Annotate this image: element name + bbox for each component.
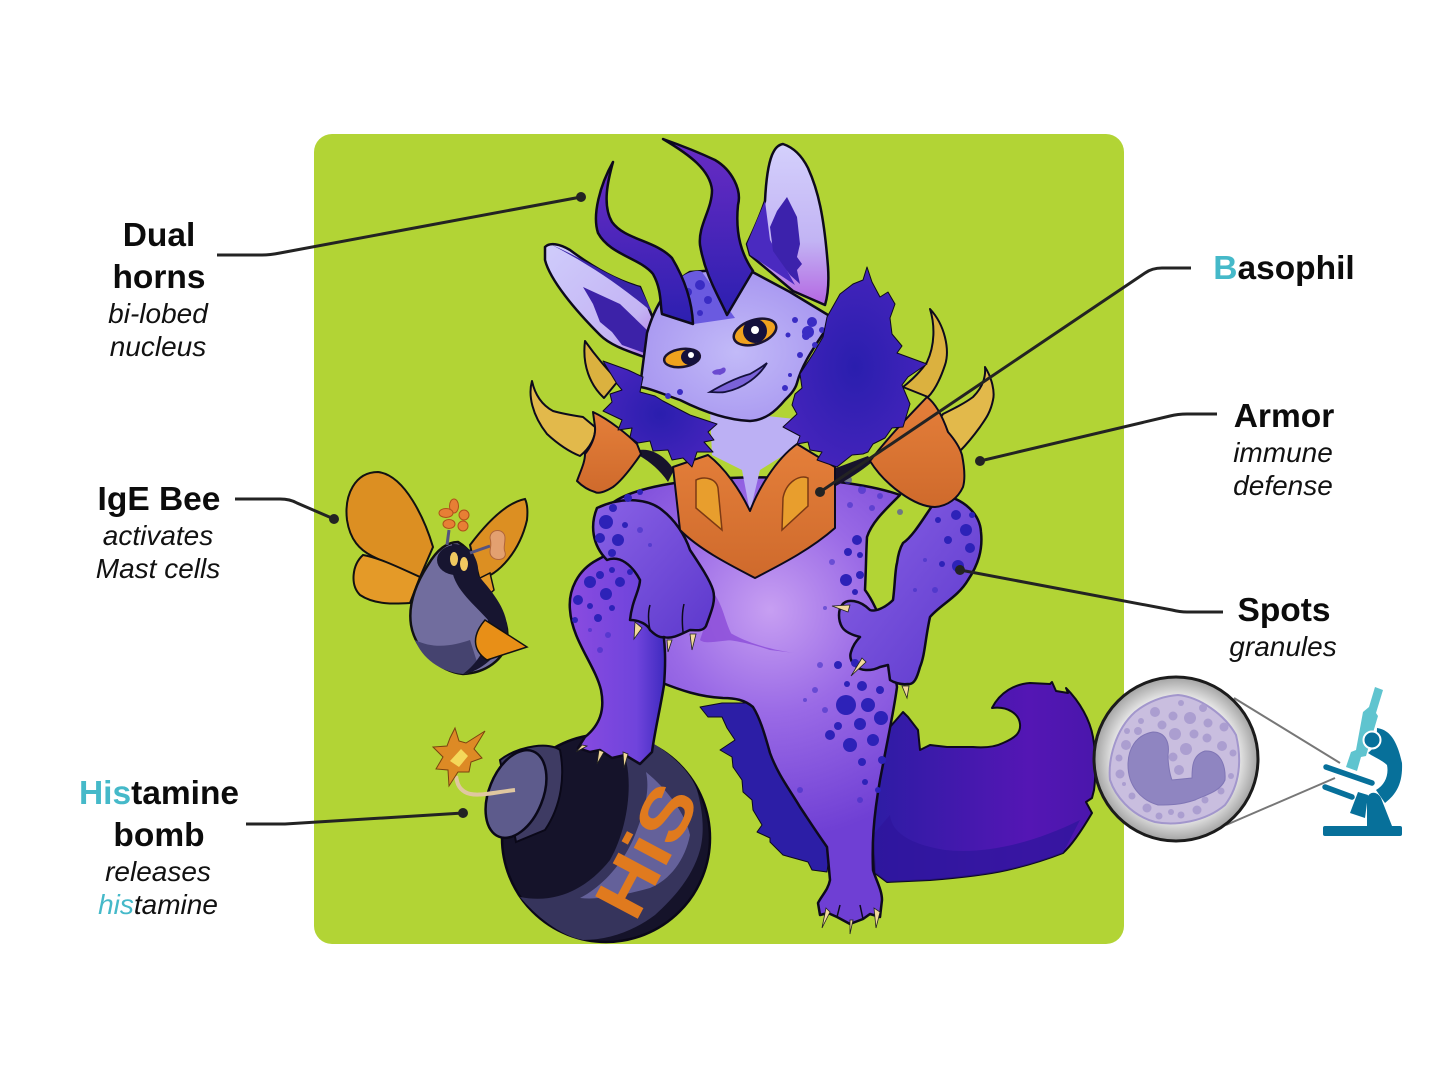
arm [1368,728,1402,803]
back spikes [584,309,947,398]
panel: green background [314,134,1124,944]
peanut [490,530,505,560]
leader: histamine bomb [246,808,468,824]
raised arm [593,500,714,638]
icon: microscope [1323,687,1402,836]
claws [576,605,909,934]
neck [710,410,805,512]
label: histamine bomb: histamine [98,889,218,920]
bi-lobed nucleus [1128,732,1225,805]
left ear [545,244,662,358]
label: basophil: Basophil [1213,250,1355,287]
eyes [450,552,458,566]
right ear [747,144,828,305]
label: histamine bomb: Histamine [79,775,239,812]
flower [439,499,469,531]
raised leg [570,553,665,764]
cap [474,741,558,847]
label: IgE bee: Mast cells [96,553,220,584]
armor: left shoulder pad [577,412,641,493]
antennae [447,530,490,553]
label: spots: Spots [1237,592,1331,629]
label: spots: granules [1229,631,1337,662]
belly fold [700,595,795,653]
label: dual horns [108,217,209,362]
head [640,268,833,421]
head patch between horns [680,271,735,324]
illustration: basophil creature [531,139,1095,934]
label: armor: defense [1233,470,1333,501]
armor: right shoulder pad [870,397,964,507]
illustration: IgE bee [347,472,527,674]
tube [1346,687,1383,771]
nose and mouth [710,363,767,392]
label: dual horns: Dual [123,217,195,254]
foot [1350,792,1392,826]
straps [640,450,872,486]
armor: chest plate [673,444,835,578]
collar fur: left [603,361,717,467]
tail [872,682,1095,882]
eyes [663,314,780,369]
cytoplasm [1110,695,1239,823]
collar fur: right [783,267,927,467]
leader: IgE bee [235,499,339,524]
torso and standing leg [610,477,900,924]
cell magnifier [1094,677,1340,841]
front spikes [531,367,994,456]
lettering: HiS [580,771,714,931]
wings [347,472,433,577]
leader: basophil [815,268,1191,497]
label: dual horns: nucleus [110,331,206,362]
granules [1116,700,1236,820]
stripe [452,544,507,674]
leader: dual horns [217,192,586,255]
neck [500,746,562,842]
label: dual horns: horns [112,259,206,296]
bomb sphere [502,734,710,942]
lower body shade [415,640,478,674]
armor: chest windows [696,478,722,530]
label: dual horns: bi-lobed [108,298,209,329]
hand toes [648,604,684,632]
body [410,542,507,674]
label: histamine bomb [79,775,239,920]
foot toes [837,905,863,919]
stage [1325,767,1372,797]
label: armor: immune [1233,437,1333,468]
label: armor [1233,398,1334,501]
spark [433,728,485,786]
head spots [665,280,825,399]
lit band [580,772,690,898]
spots: shoulders, leg, flank [572,489,975,793]
label: armor: Armor [1234,398,1334,435]
shaded band [520,740,703,940]
lens [1094,677,1258,841]
stinger [475,620,527,660]
fuse [456,776,515,795]
label: histamine bomb: bomb [113,817,205,854]
label: IgE bee [96,481,220,584]
label: IgE bee: IgE Bee [98,481,220,518]
zoom lines [1226,698,1340,825]
right arm [839,495,981,684]
label: histamine bomb: releases [105,856,211,887]
back fur [700,703,830,872]
base [1323,826,1402,836]
leader: spots [955,565,1223,612]
label: spots [1229,592,1337,662]
tail shade [873,815,1080,882]
right horn [663,139,753,315]
left horn [596,162,693,324]
label: IgE bee: activates [103,520,213,551]
objective knob [1364,732,1380,748]
illustration: histamine bomb [433,728,714,942]
leader: armor [975,414,1217,466]
